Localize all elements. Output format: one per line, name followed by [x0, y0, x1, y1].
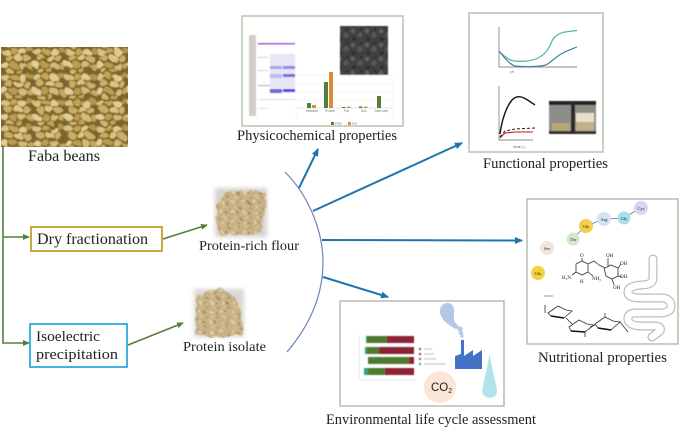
separator arc: [285, 172, 323, 352]
label: Nutritional properties: Nutritional properties: [538, 350, 667, 366]
panel: nutritional properties: H₂N: [562, 276, 571, 281]
icon: CO2 circle: 2: [448, 388, 452, 395]
peptide chain: [531, 201, 648, 280]
icon: water drop: [482, 354, 497, 398]
bar chart: composition: Fat: [344, 109, 349, 113]
label: Protein isolate: Protein isolate: [183, 340, 266, 355]
peptide chain: Gly: [621, 216, 628, 221]
photo: test tubes: [549, 101, 596, 134]
panel: nutritional properties: NH₂: [592, 277, 601, 282]
peptide chain: Glu: [583, 224, 590, 229]
peptide chain: Ser: [544, 246, 550, 251]
line chart: stress vs strain: Strain (-): [513, 145, 525, 149]
peptide chain: Thr: [570, 237, 577, 242]
bar chart: composition: FPI: [352, 122, 357, 126]
bar chart: composition: Moisture: [306, 109, 318, 113]
bar chart: composition: Ash: [361, 109, 367, 113]
box: Isoelectric precipitation: precipitation: [36, 347, 119, 363]
peptide chain: Glu: [535, 271, 542, 276]
panel: environmental life cycle assessment: [340, 301, 504, 406]
panel: nutritional properties: OH: [620, 275, 628, 280]
gel electrophoresis image: [249, 35, 295, 116]
icon: smoke: [440, 303, 464, 338]
label: Faba beans: Faba beans: [28, 148, 100, 165]
process flow lines: [3, 147, 207, 345]
arrow: to physicochemical: [299, 149, 318, 188]
label: Functional properties: Functional properties: [483, 156, 608, 172]
stacked bar chart: [359, 335, 446, 380]
icon: CO2 circle: CO: [431, 382, 448, 394]
arrow: to nutritional: [322, 239, 522, 242]
SEM micrograph: [340, 26, 388, 75]
panel: functional properties: [469, 13, 603, 152]
panel: nutritional properties: OH: [613, 286, 621, 291]
panel: nutritional properties: OH: [606, 254, 614, 259]
bar chart: composition: FPR: [335, 122, 342, 126]
line chart: protein solubility vs pH: pH: [510, 70, 515, 74]
peptide chain: Cys: [637, 206, 645, 211]
peptide chain: Arg: [601, 217, 608, 222]
photo: faba beans: [0, 39, 136, 155]
bar chart: composition: Total carb.: [374, 109, 389, 113]
icon: factory: [455, 340, 482, 369]
icon: intestine: [628, 259, 671, 337]
box: Isoelectric precipitation: [30, 324, 127, 367]
bar chart: composition: Protein: [325, 109, 335, 113]
panel: nutritional properties: [527, 199, 678, 344]
photo: protein isolate: [194, 289, 245, 337]
box: Isoelectric precipitation: Isoelectric: [36, 329, 100, 345]
molecule: oligosaccharide: [544, 296, 628, 337]
label: Protein-rich flour: Protein-rich flour: [199, 239, 299, 254]
bar chart: composition: [296, 68, 392, 126]
box: Dry fractionation: Dry fractionation: [37, 231, 148, 248]
label: Physicochemical properties: Physicochemical properties: [237, 128, 397, 144]
molecule: vicine: [572, 258, 622, 285]
photo: protein-rich flour: [215, 188, 267, 237]
panel: nutritional properties: OH: [620, 262, 628, 267]
panel: nutritional properties: O: [580, 254, 584, 259]
panel: nutritional properties: H: [580, 280, 584, 285]
panel: physicochemical properties: [242, 16, 403, 126]
icon: CO2 circle: [424, 371, 456, 403]
arrow: to functional: [313, 143, 462, 211]
label: Environmental life cycle assessment: Environmental life cycle assessment: [326, 412, 536, 428]
arrow: to environmental: [323, 277, 388, 297]
box: Dry fractionation: [31, 227, 162, 251]
